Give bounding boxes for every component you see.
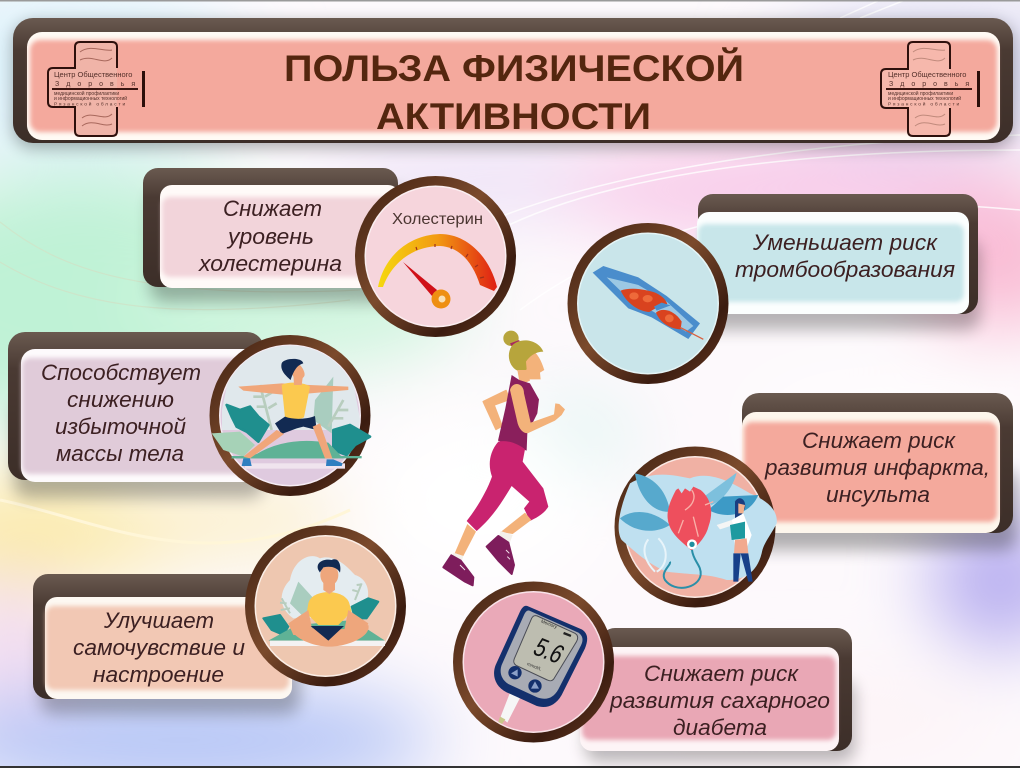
text: lowers cholesterol: холестерина xyxy=(198,251,342,276)
text: reduces excess weight: Способствует xyxy=(41,360,201,385)
panel: heart attack and stroke xyxy=(742,393,1017,550)
icon: cholesterol gauge: Холестерин xyxy=(392,211,483,228)
icon: meditation pose xyxy=(245,526,406,686)
logo: left: Рязанской области xyxy=(54,100,127,108)
panel: diabetes xyxy=(580,628,855,762)
text: reduces thrombosis: тромбообразования xyxy=(735,257,955,282)
text: reduces thrombosis xyxy=(735,230,955,282)
icon: blood vessel with clot xyxy=(568,223,728,384)
icon: doctor and heart xyxy=(614,446,777,608)
text: mood: настроение xyxy=(93,662,224,687)
text: lowers cholesterol: уровень xyxy=(226,224,314,249)
text: lowers cholesterol: Снижает xyxy=(223,196,322,221)
icon: glucose meter xyxy=(453,582,614,742)
logo: left: Здоровья xyxy=(55,81,142,88)
panel: reduces thrombosis xyxy=(697,194,980,330)
logo: right xyxy=(881,42,980,136)
heading xyxy=(284,47,744,137)
text: reduces excess weight: снижению xyxy=(67,387,174,412)
logo: right: и информационных технологий xyxy=(888,95,961,102)
icon: glucose meter: mmol/L xyxy=(526,661,543,672)
panel: lowers cholesterol xyxy=(143,168,410,302)
panel: header xyxy=(13,18,1013,148)
logo: left: и информационных технологий xyxy=(54,95,127,102)
text: mood xyxy=(73,608,245,687)
text: diabetes: диабета xyxy=(673,715,767,740)
heading: АКТИВНОСТИ xyxy=(376,96,651,137)
logo: right: Рязанской области xyxy=(888,100,961,108)
text: mood: самочувствие и xyxy=(73,635,245,660)
text: diabetes: развития сахарного xyxy=(609,688,830,713)
text: diabetes xyxy=(609,661,830,740)
panel: reduces excess weight xyxy=(8,332,264,498)
logo: right: медицинской профилактики xyxy=(888,90,953,97)
logo: right: Здоровья xyxy=(889,81,976,88)
icon: glucose meter: Memory xyxy=(540,619,558,630)
text: heart attack and stroke: инсульта xyxy=(826,482,930,507)
icon: glucose meter: 5.6 xyxy=(528,633,569,670)
text: diabetes: Снижает риск xyxy=(644,661,800,686)
icon: yoga warrior pose xyxy=(210,335,370,496)
icon: cholesterol gauge xyxy=(355,176,516,337)
logo: left xyxy=(48,42,145,136)
text: reduces excess weight xyxy=(41,360,201,466)
text: reduces excess weight: избыточной xyxy=(55,414,186,439)
text: heart attack and stroke: Снижает риск xyxy=(802,428,957,453)
text: mood: Улучшает xyxy=(103,608,214,633)
heading: ПОЛЬЗА ФИЗИЧЕСКОЙ xyxy=(284,47,744,89)
text: reduces excess weight: массы тела xyxy=(56,441,184,466)
text: reduces thrombosis: Уменьшает риск xyxy=(752,230,939,255)
panel: mood xyxy=(33,574,300,714)
logo: right: Центр Общественного xyxy=(888,70,966,79)
illustration: woman running xyxy=(443,331,565,585)
text: heart attack and stroke: развития инфаркта, xyxy=(764,455,990,480)
logo: left: медицинской профилактики xyxy=(54,90,119,97)
logo: left: Центр Общественного xyxy=(54,70,132,79)
text: heart attack and stroke xyxy=(764,428,990,507)
text: lowers cholesterol xyxy=(198,196,342,276)
